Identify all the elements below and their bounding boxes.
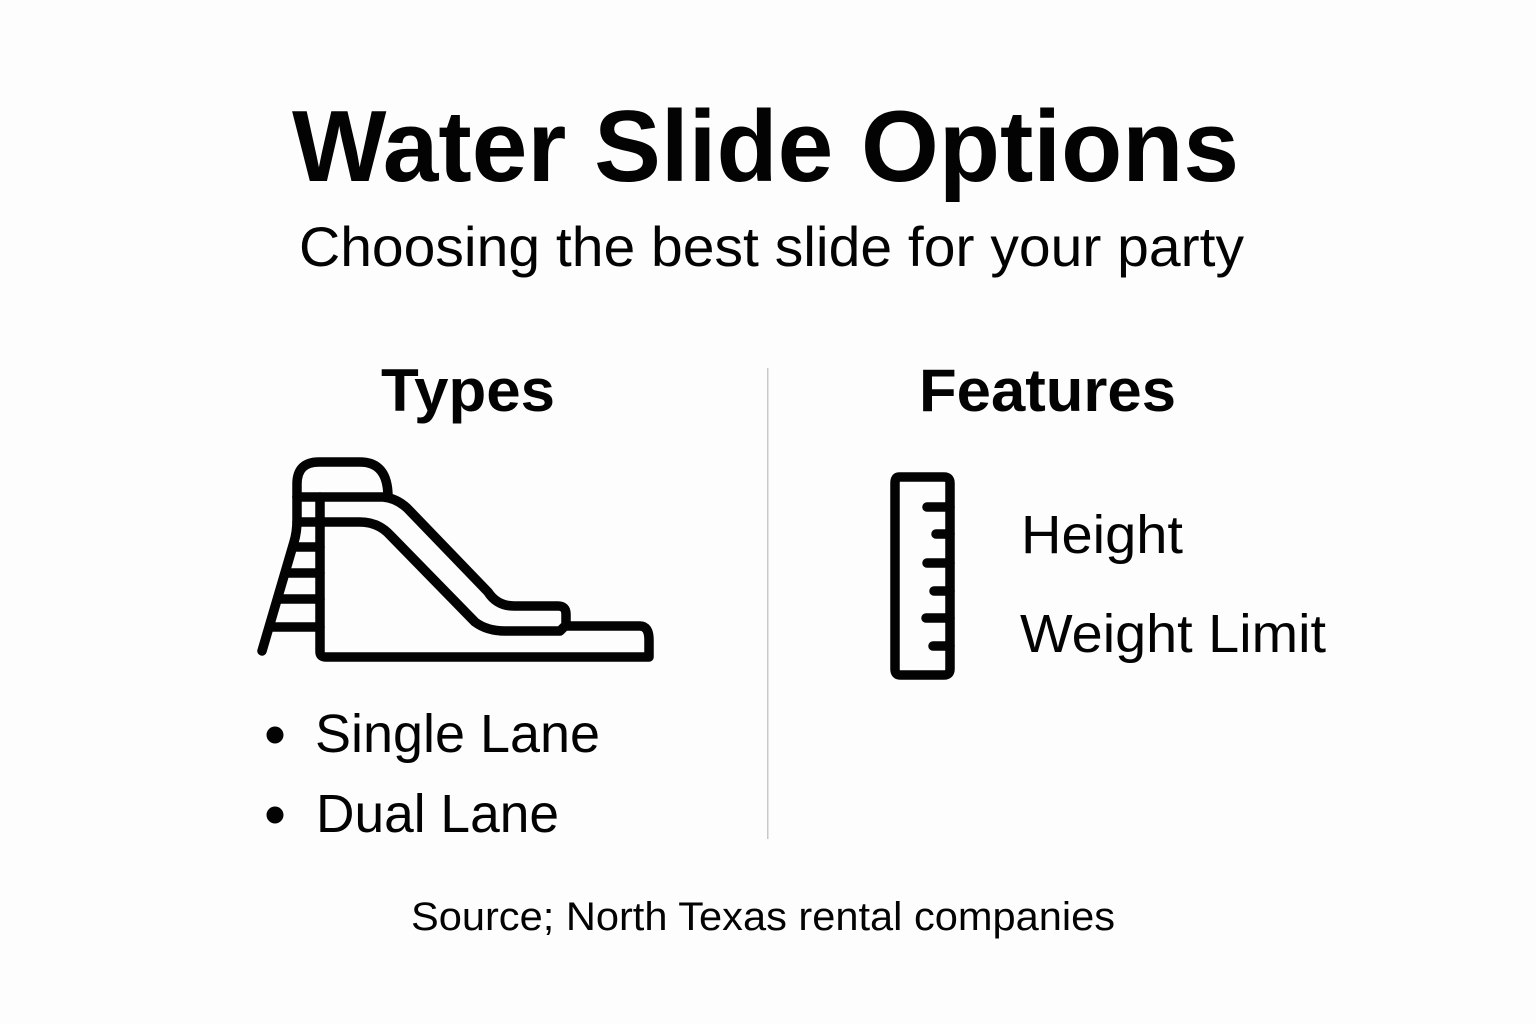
icon: ruler bbox=[895, 477, 950, 675]
item: height: Height bbox=[1021, 505, 1183, 565]
list: slide types bbox=[266, 704, 600, 844]
item: single lane: Single Lane bbox=[315, 704, 600, 764]
heading: features: Features bbox=[919, 357, 1176, 424]
panel: types bbox=[262, 357, 649, 844]
center divider bbox=[767, 368, 768, 839]
item: dual lane: Dual Lane bbox=[316, 784, 559, 844]
subtitle: Choosing the best slide for your party bbox=[299, 215, 1244, 278]
title: Water Slide Options bbox=[292, 91, 1239, 203]
icon: water slide bbox=[262, 462, 649, 657]
bullet: single lane bbox=[266, 726, 284, 744]
heading: types: Types bbox=[381, 357, 555, 424]
source note: Source; North Texas rental companies bbox=[411, 895, 1115, 939]
item: weight limit: Weight Limit bbox=[1020, 604, 1326, 664]
bullet: dual lane bbox=[266, 806, 284, 824]
panel: features bbox=[895, 357, 1326, 675]
